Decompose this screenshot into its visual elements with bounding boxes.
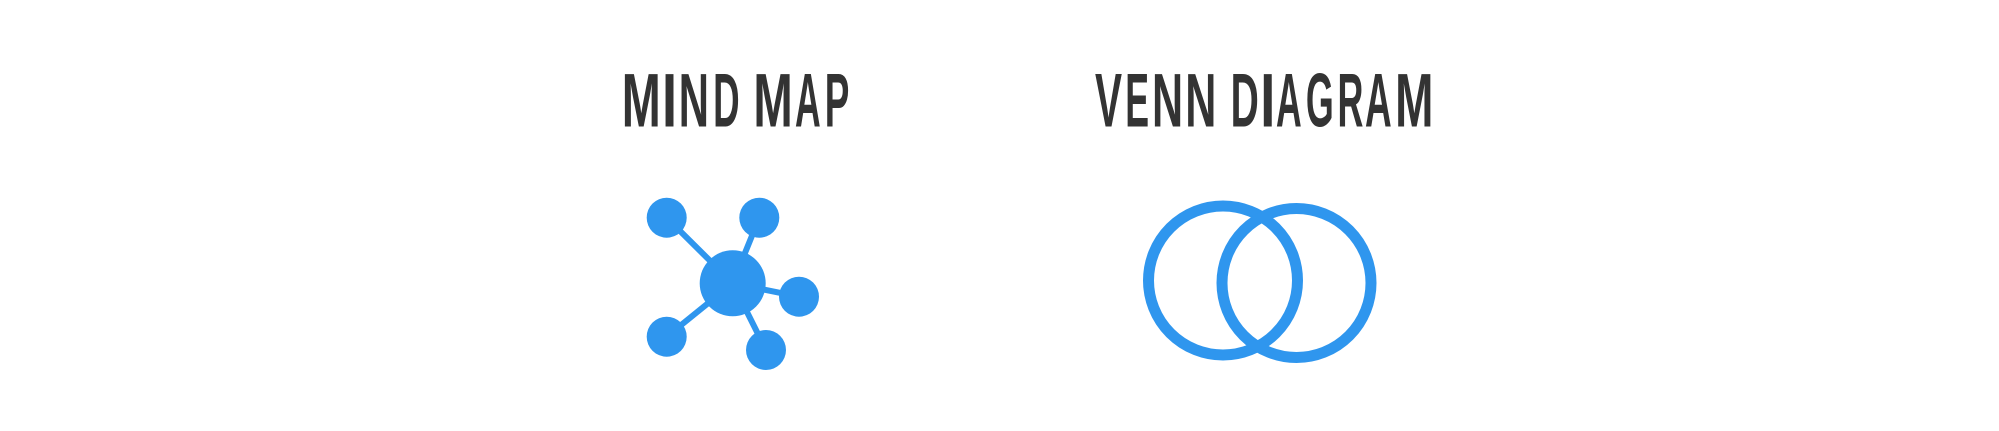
heading: venn diagram: A bbox=[1276, 59, 1302, 144]
heading: venn diagram: A bbox=[1365, 59, 1392, 144]
heading: mind map: D bbox=[713, 59, 740, 144]
heading: mind map: N bbox=[679, 59, 709, 144]
heading: mind map: I bbox=[662, 59, 677, 144]
icon: mind map network bbox=[647, 198, 819, 370]
heading: venn diagram: R bbox=[1338, 59, 1363, 144]
heading: mind map: M bbox=[622, 59, 661, 144]
heading: venn diagram: N bbox=[1152, 59, 1183, 144]
text: P bbox=[825, 59, 849, 144]
heading: mind map: A bbox=[795, 59, 821, 144]
heading: venn diagram: D bbox=[1231, 59, 1259, 144]
heading: venn diagram: G bbox=[1306, 59, 1334, 144]
heading: venn diagram: E bbox=[1125, 59, 1149, 144]
heading: venn diagram: M bbox=[1395, 59, 1433, 144]
icon: venn diagram circles bbox=[1148, 206, 1371, 358]
heading: mind map: M bbox=[753, 59, 793, 144]
heading: venn diagram: N bbox=[1185, 59, 1216, 144]
heading: venn diagram: V bbox=[1095, 59, 1122, 144]
heading: venn diagram: I bbox=[1260, 59, 1275, 144]
